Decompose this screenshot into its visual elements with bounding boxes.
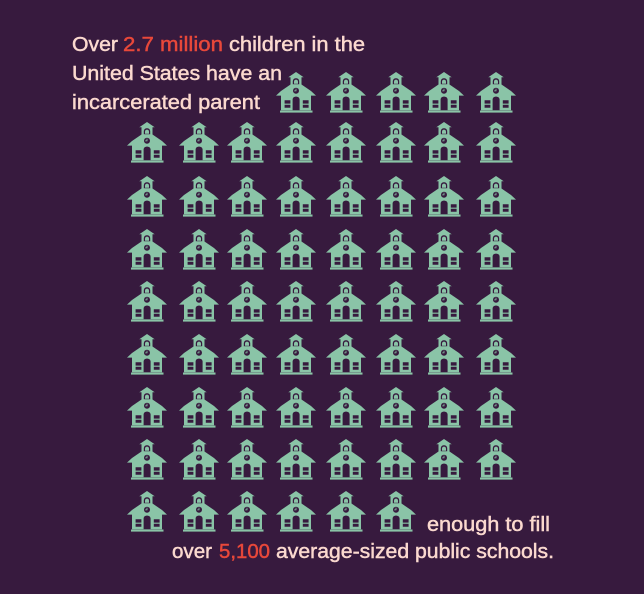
heading: over 2.7 million children: incarcerated parent (72, 92, 260, 114)
heading: over 2.7 million children (72, 34, 365, 114)
heading: over 2.7 million children: United States have an (72, 63, 282, 85)
closing text: enough to fill over 5,100 schools: over (172, 541, 212, 563)
heading: over 2.7 million children: 2.7 million (123, 34, 223, 56)
closing text: enough to fill over 5,100 schools: 5,100 (219, 541, 270, 563)
heading: over 2.7 million children: Over (72, 34, 118, 56)
heading: over 2.7 million children: children in the (229, 34, 365, 56)
closing text: enough to fill over 5,100 schools: enough to fill (427, 514, 550, 536)
school icon grid (127, 72, 516, 532)
closing text: enough to fill over 5,100 schools (172, 514, 554, 563)
closing text: enough to fill over 5,100 schools: average-sized public schools. (276, 541, 554, 563)
